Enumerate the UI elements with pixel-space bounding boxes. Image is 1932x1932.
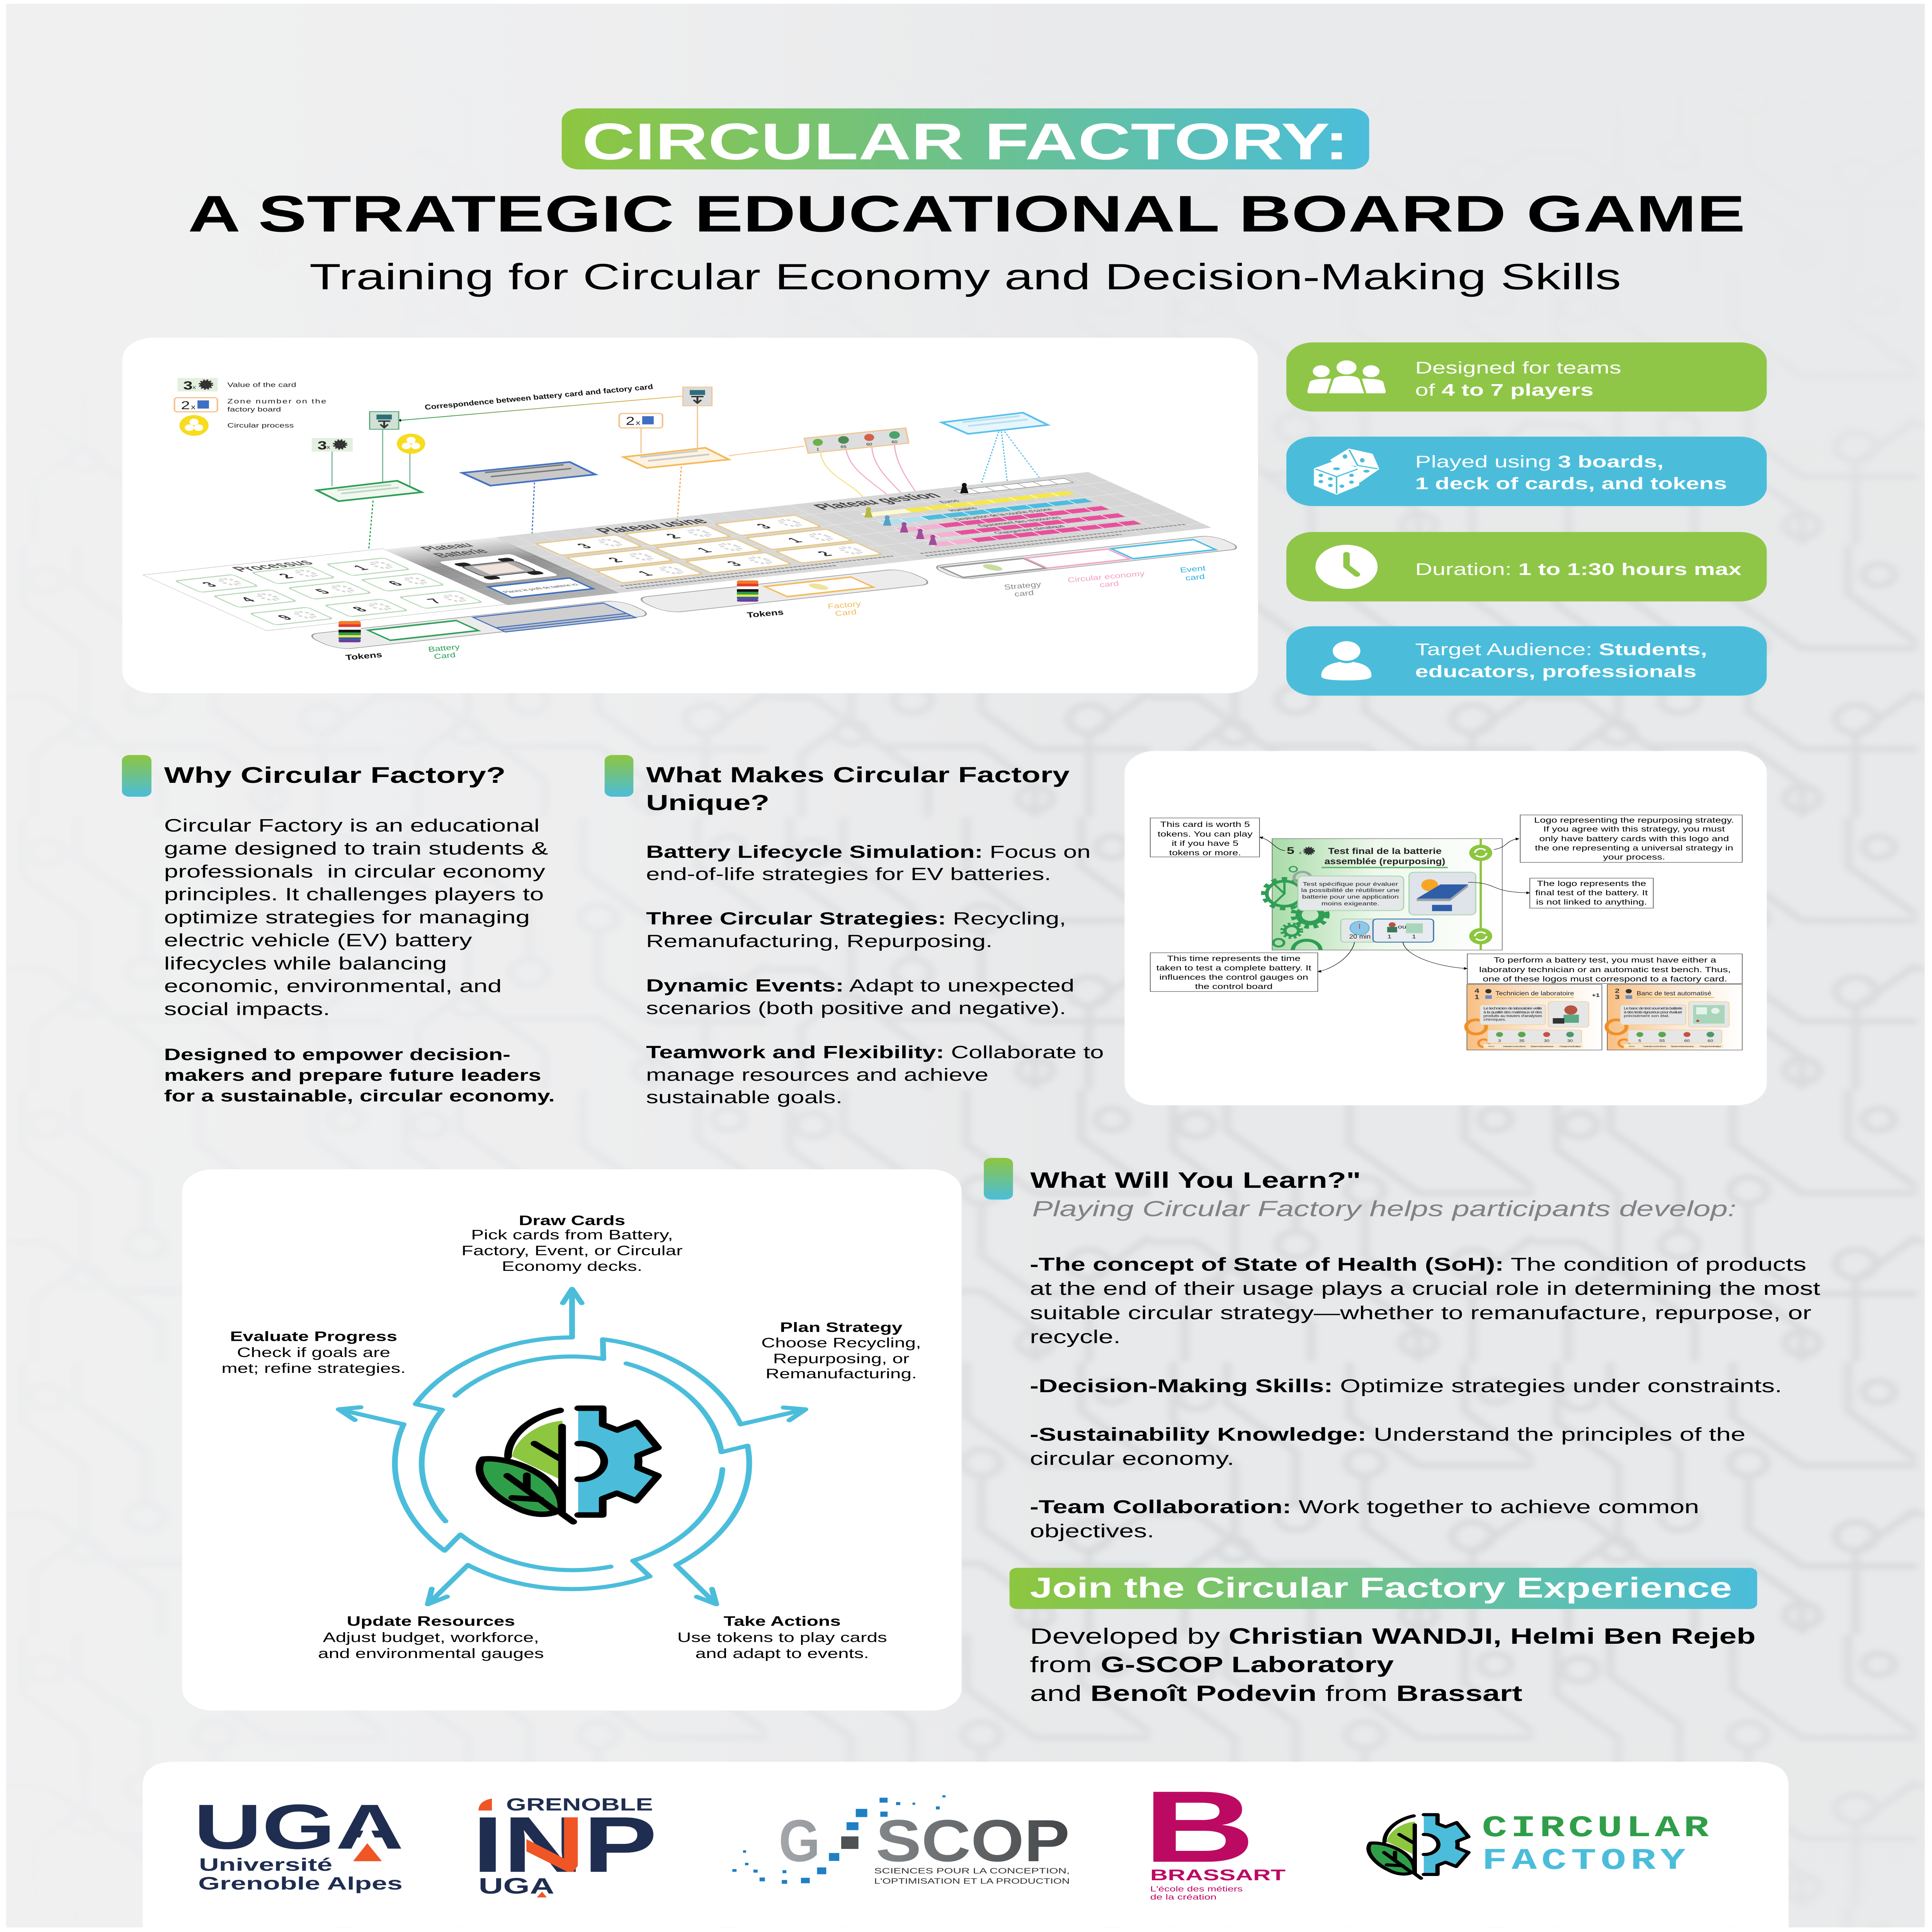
board: Plateau usine: 1 — [783, 536, 806, 544]
callout: card value — [1150, 818, 1260, 857]
board: Plateau usine: Plateau usine — [591, 516, 713, 536]
callout: test logo: final test of the battery. It — [1535, 889, 1648, 897]
banner: join the experience: Join the Circular Factory Experience — [1030, 1572, 1732, 1604]
heading: A STRATEGIC EDUCATIONAL BOARD GAME — [188, 185, 1745, 243]
factory card: laboratory technician: 3 — [1498, 1039, 1501, 1043]
callout: time: influences the control gauges on — [1159, 973, 1308, 981]
factory card: laboratory technician: 4 — [1475, 988, 1480, 995]
legend: Zone number on the — [227, 398, 326, 405]
step: plan strategy: Repurposing, or — [773, 1351, 909, 1366]
body text: social impacts. — [164, 999, 330, 1019]
feature list: Remanufacturing, Repurposing. — [646, 931, 993, 951]
learning outcomes: -Sustainability Knowledge: Understand the principles of the — [1030, 1423, 1745, 1445]
body text: professionals in circular economy — [164, 862, 546, 882]
title pill: CIRCULAR FACTORY: — [582, 112, 1349, 170]
callout: card value: This card is worth 5 — [1160, 820, 1250, 828]
step: evaluate progress: Evaluate Progress — [230, 1329, 397, 1344]
logo: Grenoble INP UGA: GRENOBLE — [506, 1795, 653, 1814]
section: what makes circular factory unique — [605, 755, 1104, 1107]
learning outcomes: -Decision-Making Skills: Optimize strategies under constraints. — [1030, 1375, 1782, 1396]
logo: Brassart — [1143, 1770, 1286, 1901]
floating icons: x — [636, 419, 641, 427]
factory card: laboratory technician: 30 — [1544, 1039, 1549, 1043]
callout: card value: tokens or more. — [1169, 849, 1241, 857]
factory card: laboratory technician: Le technicien de laboratoire veille — [1483, 1007, 1542, 1010]
factory card: laboratory technician: €/mn — [1488, 1046, 1495, 1048]
board: Plateau gestion: Destruction de la couche d'ozone — [951, 507, 1055, 521]
board: Plateau gestion: Euros — [937, 499, 961, 504]
logo: G-SCOP — [732, 1795, 1070, 1886]
board: Plateau gestion: Épuisement des ressources — [975, 515, 1063, 528]
card: battery test — [1263, 838, 1502, 950]
board: Plateau gestion — [793, 472, 1212, 560]
card captions: card — [1099, 579, 1119, 589]
token stack 1 — [338, 621, 361, 642]
body text: principles. It challenges players to — [164, 884, 544, 904]
callout: strategy logo: the one representing a universal strategy in — [1535, 844, 1733, 852]
bold statement: makers and prepare future leaders — [164, 1066, 541, 1084]
body text: lifecycles while balancing — [164, 954, 447, 973]
callout: card value: it if you have 5 — [1172, 839, 1238, 847]
body text: optimize strategies for managing — [164, 908, 530, 927]
credits: and Benoît Podevin from Brassart — [1030, 1681, 1522, 1706]
factory card: laboratory technician: 1 — [1475, 994, 1479, 1001]
heading: Why Circular Factory? — [164, 763, 506, 788]
board: Plateau usine: 1 — [692, 546, 716, 554]
floating cards: 65 — [840, 445, 847, 449]
callout: required resources: To perform a battery test, you must have either a — [1494, 956, 1716, 964]
factory card: automatic test bench: €/mn — [1629, 1046, 1635, 1048]
factory card: laboratory technician: Épuisement des ressources — [1531, 1046, 1554, 1048]
callout: time: taken to test a complete battery. It — [1156, 964, 1311, 972]
callout: strategy logo: your process. — [1603, 853, 1665, 861]
callout: time: the control board — [1195, 982, 1273, 991]
board: Plateau usine: 3 — [723, 560, 746, 568]
board: Plateau Batterie — [384, 537, 619, 605]
board: Processus: 6 — [384, 579, 406, 587]
callout: required resources — [1467, 954, 1742, 983]
correspondence arrow: Correspondence between battery card and factory card — [424, 383, 654, 411]
feature list: Dynamic Events: Adapt to unexpected — [646, 976, 1074, 995]
info pill: team size: Designed for teams — [1415, 359, 1621, 377]
callout: required resources: one of these logos must correspond to a factory card. — [1483, 975, 1727, 983]
legend — [174, 378, 326, 436]
callout arrows — [1260, 837, 1530, 972]
legend: Circular process — [227, 422, 294, 429]
logo: Université Grenoble Alpes: UGA — [194, 1791, 404, 1862]
panel: partner logos — [143, 1762, 1789, 1927]
card: battery test: 20 min — [1349, 934, 1371, 940]
logo: G-SCOP: L'OPTIMISATION ET LA PRODUCTION — [874, 1877, 1070, 1886]
card: battery test: 5 — [1287, 845, 1294, 856]
logo: Brassart: B — [1143, 1770, 1255, 1884]
legend: 3 — [183, 379, 193, 392]
step: draw cards: Factory, Event, or Circular — [461, 1243, 683, 1258]
tray: battery cards — [304, 600, 655, 650]
learning outcomes — [1030, 1253, 1820, 1541]
panel: game cycle — [182, 1169, 962, 1711]
board: Plateau usine: 2 — [813, 550, 836, 558]
card: battery test: Test final de la batterie — [1328, 846, 1442, 856]
bold statement: Designed to empower decision- — [164, 1045, 510, 1064]
card captions: Card — [433, 651, 456, 661]
step: take actions: Use tokens to play cards — [677, 1630, 887, 1645]
factory card: laboratory technician — [1466, 985, 1602, 1050]
heading: What Makes Circular Factory — [646, 762, 1070, 787]
info pill: duration: Duration: 1 to 1:30 hours max — [1415, 560, 1742, 579]
floating icons: 2 — [626, 415, 635, 427]
pawns — [864, 483, 968, 545]
learning outcomes: at the end of their usage plays a crucial role in determining the most — [1030, 1278, 1820, 1299]
heading marker — [605, 755, 633, 797]
legend: 2 — [181, 399, 190, 412]
info pill: components: 1 deck of cards, and tokens — [1415, 474, 1727, 493]
step: plan strategy: Plan Strategy — [780, 1320, 903, 1335]
section: why circular factory — [122, 755, 555, 1105]
factory card: automatic test bench — [1607, 985, 1742, 1050]
icon: dice — [1315, 450, 1378, 493]
card captions: Tokens — [746, 608, 784, 620]
connector lines — [332, 406, 1043, 588]
step: evaluate progress — [221, 1329, 406, 1376]
floating icons — [312, 387, 712, 454]
info pill: components — [1286, 437, 1767, 506]
credits: Developed by Christian WANDJI, Helmi Ben Rejeb — [1030, 1624, 1755, 1648]
callout: test logo: is not linked to anything. — [1536, 898, 1647, 906]
card captions: card — [1185, 573, 1205, 582]
factory card: laboratory technician: chimiques. — [1483, 1018, 1506, 1022]
info pill: team size: of 4 to 7 players — [1415, 381, 1594, 400]
icon: clock — [1315, 545, 1378, 589]
feature list: Battery Lifecycle Simulation: Focus on — [646, 842, 1090, 862]
tray: strategy, circular economy and event cards — [930, 535, 1243, 580]
card captions: Battery — [428, 643, 461, 653]
card: battery test: assemblée (repurposing) — [1325, 856, 1445, 866]
panel: board game overview — [122, 338, 1259, 693]
credits: from G-SCOP Laboratory — [1030, 1652, 1394, 1677]
learning outcomes: circular economy. — [1030, 1448, 1234, 1469]
callout: time — [1150, 953, 1318, 992]
board: Plateau usine: 2 — [604, 556, 627, 564]
subtitle: Training for Circular Economy and Decision-Making Skills — [310, 257, 1621, 297]
board: Processus: 8 — [348, 605, 371, 613]
floating cards: 60 — [866, 442, 872, 447]
learning outcomes: -The concept of State of Health (SoH): The condition of products — [1030, 1253, 1806, 1275]
callout: strategy logo: only have battery cards with this logo and — [1539, 835, 1729, 843]
logo: Université Grenoble Alpes — [194, 1791, 404, 1894]
factory card: laboratory technician: à la qualité des matériaux et des — [1483, 1010, 1542, 1014]
step: draw cards: Draw Cards — [519, 1213, 625, 1228]
factory card: automatic test bench: 5 — [1638, 1039, 1641, 1043]
bold statement: for a sustainable, circular economy. — [164, 1087, 555, 1105]
factory card: automatic test bench: 2 — [1615, 988, 1619, 995]
feature list: Three Circular Strategies: Recycling, — [646, 909, 1066, 928]
legend: Value of the card — [227, 381, 296, 389]
factory card: laboratory technician: Technicien de laboratoire — [1495, 990, 1574, 997]
logo: Université Grenoble Alpes: Grenoble Alpes — [198, 1874, 403, 1894]
learning outcomes: suitable circular strategy—whether to remanufacture, repurpose, or — [1030, 1302, 1811, 1323]
card: battery test: Test spécifique pour évaluer — [1303, 881, 1398, 887]
bold statement — [164, 1045, 555, 1105]
body text: Circular Factory is an educational — [164, 816, 539, 836]
logo: Brassart: BRASSART — [1150, 1867, 1286, 1884]
step: plan strategy — [761, 1320, 921, 1381]
card captions: Event — [1179, 564, 1206, 574]
floating icons: 3 — [318, 439, 327, 452]
legend: x — [192, 385, 196, 390]
logo: Brassart: de la création — [1150, 1893, 1216, 1901]
step: update resources: Update Resources — [347, 1614, 515, 1629]
legend: factory board — [227, 406, 281, 413]
logo: G-SCOP: SCIENCES POUR LA CONCEPTION, — [874, 1866, 1070, 1875]
board: Processus: 1 — [349, 564, 372, 571]
info pill: target audience — [1286, 626, 1767, 696]
step: draw cards: Economy decks. — [502, 1259, 642, 1274]
board: Processus: 3 — [197, 580, 221, 588]
card: battery test: 1 — [1387, 933, 1391, 940]
board: Plateau usine: 3 — [573, 542, 596, 550]
tray: factory cards — [633, 568, 935, 613]
board: Plateau gestion: Changement climatique — [992, 524, 1067, 535]
callout: required resources: laboratory technician or an automatic test bench. Thus, — [1479, 966, 1731, 974]
feature list: scenarios (both positive and negative). — [646, 998, 1066, 1018]
board: Plateau Batterie: Placez le profil de batterie ici. — [501, 583, 582, 594]
body text: game designed to train students & — [164, 838, 548, 859]
isometric game boards — [143, 471, 1259, 653]
board: Plateau usine — [496, 505, 917, 593]
floating cards: 1 — [816, 447, 820, 451]
intro line: Playing Circular Factory helps participants develop: — [1032, 1196, 1736, 1221]
card: battery test: moins exigeante. — [1321, 900, 1379, 906]
floating cards — [317, 413, 1048, 501]
floating icons: x — [327, 445, 330, 450]
factory card: automatic test bench: Épuisement des ressources — [1671, 1046, 1694, 1048]
logo: Grenoble INP UGA: UGA — [478, 1873, 554, 1898]
info pill: duration — [1286, 532, 1767, 601]
logo: G-SCOP: G — [779, 1807, 820, 1874]
card captions: Tokens — [345, 650, 383, 662]
logo: Circular Factory: CIRCULAR — [1482, 1811, 1709, 1845]
card captions: card — [1014, 588, 1034, 598]
credits — [1030, 1624, 1755, 1706]
logo: Circular Factory: FACTORY — [1482, 1844, 1685, 1878]
icon: people — [1308, 361, 1386, 393]
heading marker — [984, 1158, 1013, 1199]
logo: Université Grenoble Alpes: Université — [199, 1855, 332, 1875]
factory card: automatic test bench: 60 — [1684, 1039, 1690, 1043]
step: plan strategy: Choose Recycling, — [761, 1335, 921, 1350]
card captions — [345, 564, 1206, 662]
board: Plateau Batterie: Batterie — [429, 547, 492, 559]
step: update resources: and environmental gauges — [318, 1646, 544, 1661]
callout: time: This time represents the time — [1167, 954, 1301, 963]
step: take actions — [677, 1614, 887, 1661]
callout: strategy logo: Logo representing the repurposing strategy. — [1534, 816, 1734, 824]
board: Processus: 4 — [236, 596, 259, 604]
step: plan strategy: Remanufacturing. — [765, 1366, 917, 1381]
board: Plateau usine: 2 — [662, 532, 685, 540]
factory card: automatic test bench: Le banc de test soumet la batterie — [1624, 1007, 1682, 1010]
icon: person — [1321, 641, 1371, 680]
factory card: laboratory technician: 30 — [1567, 1039, 1573, 1043]
step: evaluate progress: Check if goals are — [237, 1345, 390, 1360]
step: evaluate progress: met; refine strategies. — [221, 1361, 406, 1376]
correspondence arrow — [398, 383, 684, 420]
factory card: laboratory technician: 35 — [1519, 1039, 1524, 1043]
learning outcomes: -Team Collaboration: Work together to achieve common — [1030, 1496, 1699, 1517]
info pill: target audience: Target Audience: Students, — [1415, 640, 1707, 659]
callout: test logo: The logo represents the — [1537, 879, 1646, 888]
heading: What Will You Learn?" — [1030, 1168, 1361, 1192]
board: Processus: 9 — [273, 614, 296, 621]
board: Processus: Processus — [228, 558, 318, 573]
callout: strategy logo — [1520, 815, 1742, 862]
floating cards: 60 — [891, 440, 898, 444]
logo: Circular Factory — [1369, 1811, 1709, 1878]
body text: economic, environmental, and — [164, 976, 502, 996]
board: Plateau gestion: Plateau gestion — [809, 490, 946, 512]
factory card: automatic test bench: Destruction couche d'ozone — [1643, 1046, 1667, 1048]
feature list — [646, 842, 1104, 1107]
icon: leaf and gear — [480, 1408, 658, 1522]
factory card: automatic test bench: à des tests rigoureux pour évaluer — [1624, 1010, 1683, 1014]
section: what will you learn — [984, 1158, 1820, 1541]
body text — [164, 816, 548, 1019]
info pill: team size — [1286, 342, 1767, 412]
factory card: laboratory technician: produits au travers d'analyses — [1483, 1014, 1542, 1018]
factory card: automatic test bench: précisément son état. — [1624, 1014, 1670, 1018]
board: Plateau usine: 1 — [634, 570, 656, 577]
board: Plateau Batterie: Plateau — [416, 541, 477, 553]
heading marker — [122, 755, 151, 797]
card captions: Card — [834, 608, 857, 617]
step: update resources — [318, 1614, 544, 1661]
logo: Brassart: L'école des métiers — [1150, 1885, 1243, 1893]
step: draw cards: Pick cards from Battery, — [471, 1227, 673, 1243]
card captions: Factory — [827, 600, 862, 611]
step: take actions: Take Actions — [724, 1614, 841, 1629]
board: Plateau usine: 3 — [752, 522, 775, 530]
step: draw cards — [461, 1213, 683, 1274]
card: battery test: 1 — [1412, 933, 1416, 940]
step: take actions: and adapt to events. — [695, 1646, 869, 1661]
factory card: automatic test bench: 3 — [1615, 994, 1619, 1001]
card captions: Circular economy — [1067, 570, 1146, 584]
learning outcomes: objectives. — [1030, 1520, 1154, 1541]
card: battery test: batterie pour une application — [1302, 893, 1399, 900]
card: battery test: x — [1299, 850, 1302, 855]
factory card: automatic test bench: 60 — [1708, 1039, 1713, 1043]
feature list: Teamwork and Flexibility: Collaborate to — [646, 1043, 1104, 1062]
legend: x — [191, 403, 196, 411]
info pill: target audience: educators, professionals — [1415, 662, 1697, 681]
feature list: end-of-life strategies for EV batteries. — [646, 864, 1051, 884]
factory card: automatic test bench: Banc de test automatisé — [1636, 990, 1711, 997]
factory card: laboratory technician: +1 — [1592, 993, 1600, 998]
feature list: sustainable goals. — [646, 1087, 842, 1107]
board: Plateau gestion: Humains — [946, 506, 979, 512]
card: battery test: ou — [1398, 923, 1406, 930]
board: Processus: 7 — [423, 597, 446, 605]
callout: card value: tokens. You can play — [1158, 830, 1253, 838]
factory card: laboratory technician: Destruction couche d'ozone — [1503, 1046, 1526, 1048]
card: battery test: la possibilité de réutiliser une — [1301, 887, 1400, 893]
board: Processus — [143, 549, 506, 631]
info pill: components: Played using 3 boards, — [1415, 452, 1663, 471]
panel: annotated card — [1124, 751, 1767, 1105]
heading: Unique? — [646, 790, 769, 815]
cycle arrows — [290, 1289, 843, 1670]
logo: G-SCOP: SCOP — [876, 1807, 1070, 1874]
learning outcomes: recycle. — [1030, 1326, 1121, 1347]
callout: strategy logo: If you agree with this strategy, you must — [1543, 825, 1725, 833]
step: update resources: Adjust budget, workforce, — [323, 1630, 539, 1645]
board: Processus: 5 — [311, 587, 334, 595]
feature list: manage resources and achieve — [646, 1065, 988, 1085]
logo: Grenoble INP UGA: INP — [472, 1800, 657, 1889]
factory card: automatic test bench: 55 — [1659, 1039, 1665, 1043]
callout: test logo — [1530, 878, 1653, 908]
factory card: laboratory technician: Changement climatique — [1560, 1046, 1581, 1048]
heading — [646, 762, 1070, 815]
token stack 2 — [737, 580, 759, 602]
board: Processus: 2 — [274, 572, 298, 580]
factory card: automatic test bench: Changement climatique — [1700, 1046, 1721, 1048]
body text: electric vehicle (EV) battery — [164, 930, 472, 951]
card captions: Strategy — [1003, 580, 1042, 591]
